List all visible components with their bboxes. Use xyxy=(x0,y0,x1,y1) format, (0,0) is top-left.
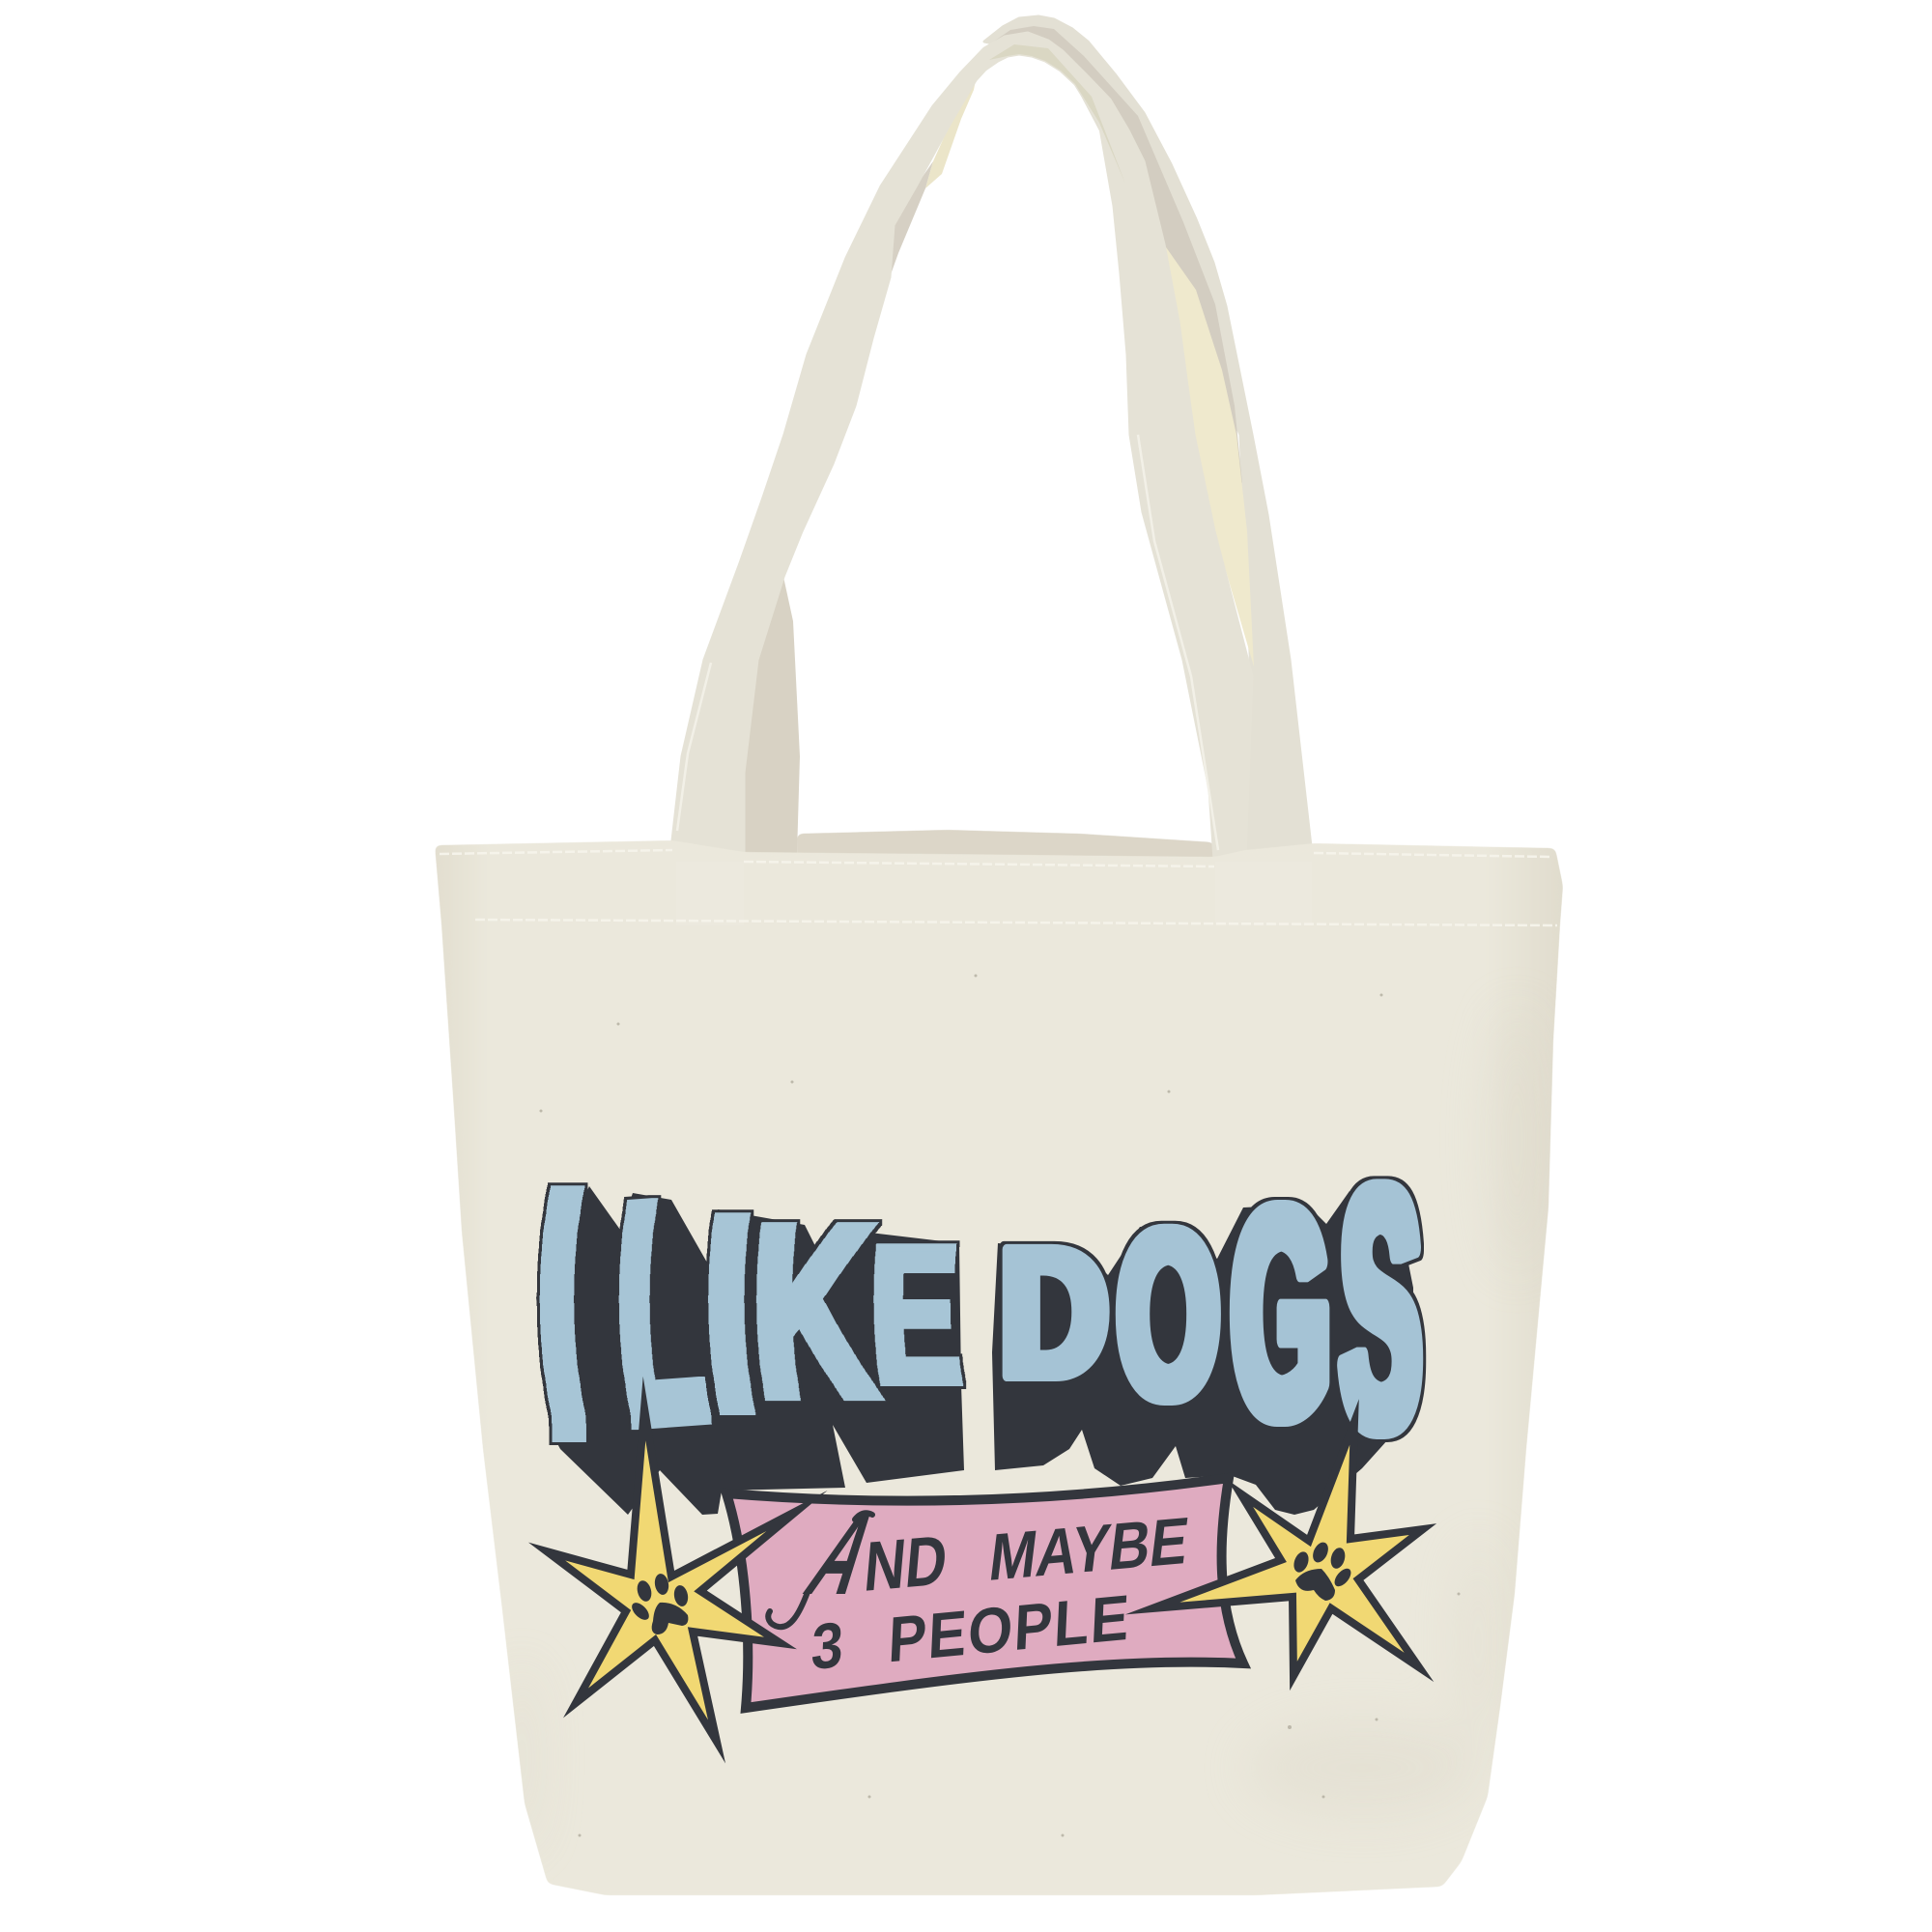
inner rim of bag opening xyxy=(797,830,1214,865)
star right xyxy=(1152,1422,1423,1676)
cream lining left xyxy=(925,80,976,188)
back strap xyxy=(984,16,1312,855)
stitching xyxy=(440,850,1557,925)
back strap shaded inner band xyxy=(976,26,1242,483)
left strap shaded fold xyxy=(890,161,933,277)
banner text: 3 PEOPLE: 3 PEOPLE xyxy=(810,1582,1132,1684)
banner xyxy=(726,1478,1243,1708)
star left xyxy=(547,1408,797,1742)
headline word: I LIKE xyxy=(548,1116,969,1510)
shadow: I LIKE xyxy=(536,1186,964,1515)
headline word: DOGS: D xyxy=(1001,1209,1107,1415)
front strap top shade xyxy=(989,44,1125,184)
banner text: AND MAYBE xyxy=(768,1491,1193,1627)
front strap xyxy=(672,33,1252,860)
icon: paw left xyxy=(629,1573,690,1634)
headline word: I LIKE: E xyxy=(883,1207,969,1425)
strap stitching xyxy=(677,435,1218,850)
headline word: I LIKE: I xyxy=(548,1116,590,1510)
cream lining right xyxy=(1164,244,1254,667)
banner text: AND MAYBE: MAYBE xyxy=(985,1503,1193,1595)
headline word: DOGS xyxy=(1001,1119,1420,1498)
headline word: DOGS: O xyxy=(1118,1181,1219,1446)
headline word: I LIKE: K xyxy=(764,1174,881,1448)
banner text: AND MAYBE: ND xyxy=(862,1521,951,1606)
back strap left lower piece xyxy=(744,577,800,855)
banner text: AND MAYBE: A xyxy=(788,1491,899,1619)
shadow: DOGS xyxy=(992,1191,1413,1515)
sewn strap patches on bag hem xyxy=(676,862,1312,925)
headline word: DOGS: G xyxy=(1232,1148,1330,1478)
tote bag illustration xyxy=(435,15,1563,1895)
fabric flecks xyxy=(539,974,1461,1837)
headline word: I LIKE: L xyxy=(628,1133,711,1492)
headline word: DOGS: S xyxy=(1341,1119,1420,1498)
headline word: I LIKE: I xyxy=(716,1159,761,1469)
fabric shading xyxy=(506,1005,1546,1855)
icon: paw right xyxy=(1292,1540,1354,1601)
handles xyxy=(672,16,1312,865)
print: dog slogan artwork xyxy=(536,1116,1423,1742)
bag body xyxy=(435,840,1563,1895)
